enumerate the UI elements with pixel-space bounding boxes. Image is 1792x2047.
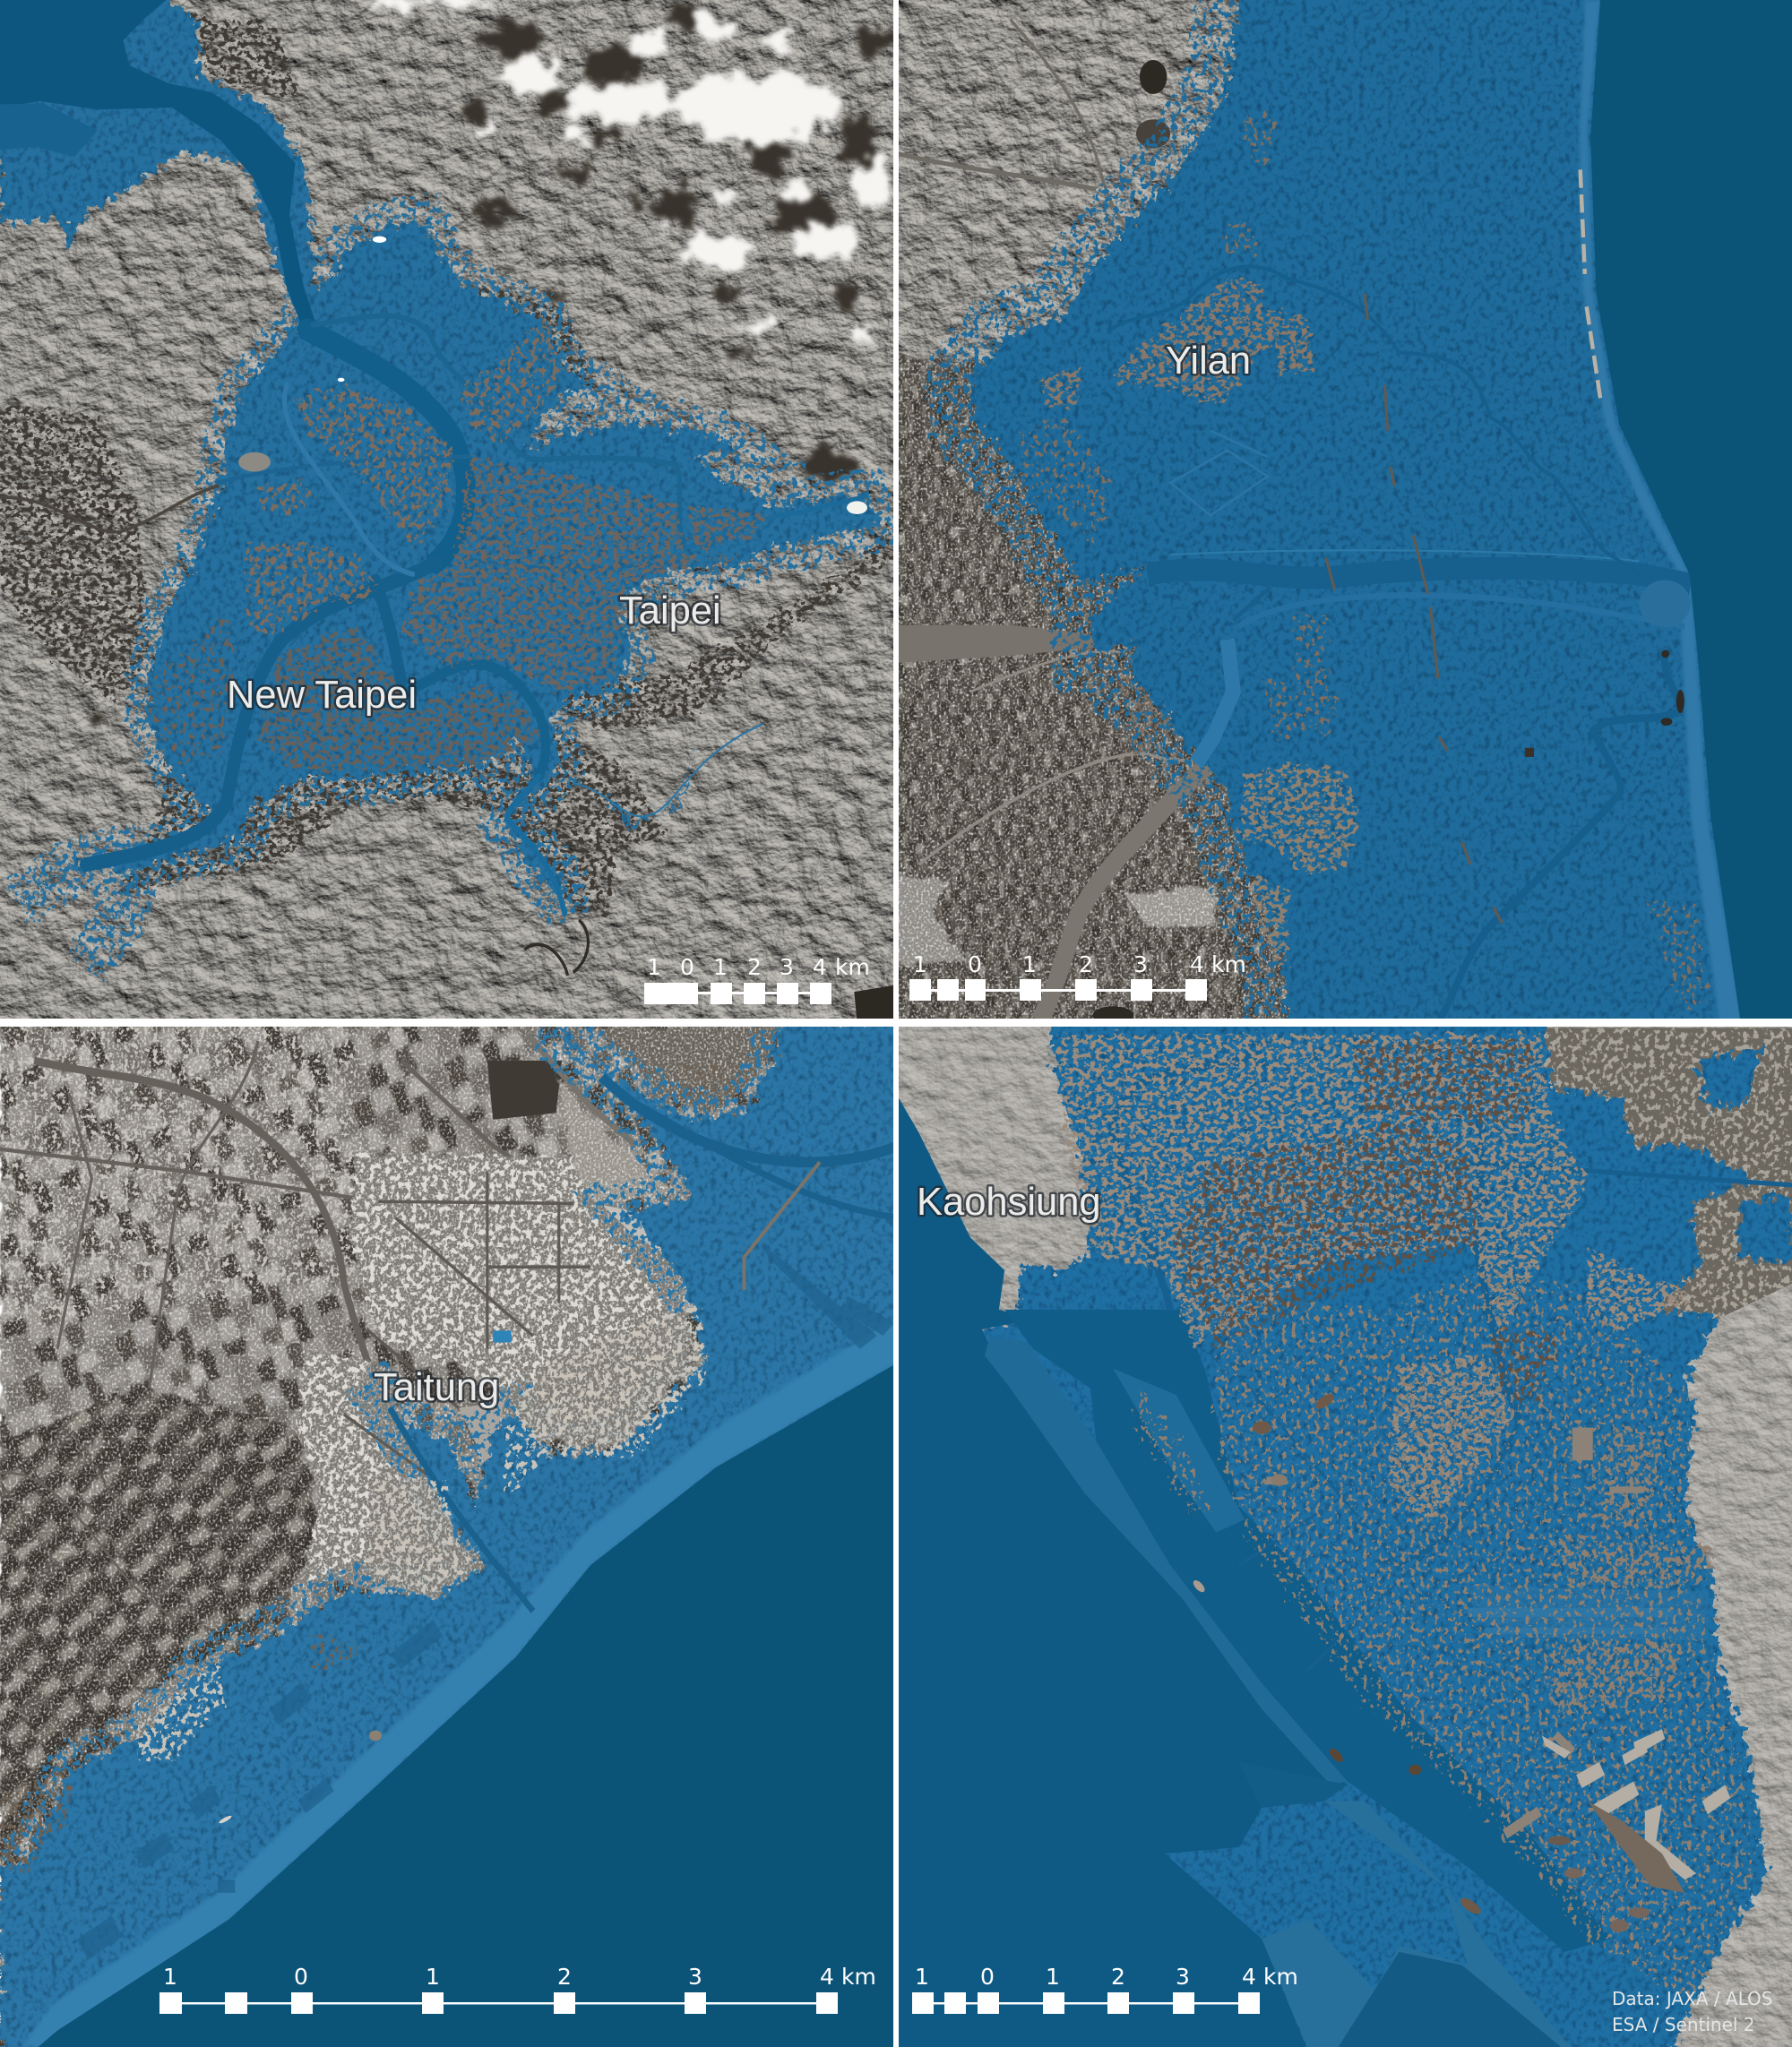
scale bar: Kaohsiung: 1 [915, 1964, 929, 1990]
dry blocks [1192, 1391, 1644, 1917]
mountain terrain [0, 0, 918, 1044]
main harbour channel [1004, 1310, 1611, 1952]
unflooded city to the north-east [1537, 1028, 1792, 1329]
scale bar: Taitung: 4 [820, 1964, 834, 1990]
flooded city: left basin [246, 320, 564, 633]
hills at the bottom [896, 874, 965, 966]
label: New Taipei: New Taipei [227, 674, 417, 717]
mixed farmland [0, 1021, 918, 2047]
white clouds [366, 0, 896, 340]
scale bar: Taitung: km [841, 1964, 876, 1990]
scale bar: Taipei: 1 [647, 954, 661, 980]
dark fields [0, 1389, 321, 1867]
town: base [120, 1152, 688, 1755]
lanyang river [1148, 568, 1691, 584]
small flooded pool [493, 1330, 512, 1342]
submerged fields [77, 1244, 894, 1959]
airport runway [1462, 1585, 1708, 1640]
Beinan river channels [390, 1077, 899, 1611]
scale bar: Taipei: 3 [780, 954, 794, 980]
sea [896, 1329, 1348, 2047]
map: Taitung coast [0, 1021, 918, 2047]
dark reservoir spots [1525, 748, 1534, 757]
airfield outline [1170, 431, 1268, 515]
map: Taipei basin [0, 0, 918, 1044]
scale bar: Kaohsiung: 0 [980, 1964, 995, 1990]
flooded city: Taipei [401, 457, 768, 692]
roads and streams [896, 20, 1193, 864]
scale bar: Taitung: 2 [557, 1964, 572, 1990]
speckled edge of the flood [0, 1021, 918, 2047]
sea and Tamsui estuary [0, 0, 320, 340]
data credit [1612, 1988, 1772, 2035]
sea [1590, 0, 1792, 1025]
streams [1107, 267, 1680, 1021]
flooded town: Yilan [1039, 278, 1314, 411]
mountain terrain [896, 0, 1297, 391]
flooded town edge [138, 1303, 705, 1762]
stadium [459, 1401, 504, 1466]
flooded city: dry building blocks [1056, 1035, 1696, 1526]
map: Kaohsiung harbour [884, 1008, 1792, 2047]
gravel river bed [896, 625, 1096, 663]
coastal sand [1581, 169, 1600, 398]
city grain [1537, 1028, 1792, 1329]
scale bar: Taitung: 3 [688, 1964, 702, 1990]
scale bar: Taipei: 1 [713, 954, 728, 980]
flooded town: Luodong [1239, 763, 1359, 966]
scale bar: Kaohsiung [912, 1964, 1298, 2014]
lake and meander at the lower right [854, 985, 896, 1021]
port basin [0, 103, 98, 157]
scale bar: Kaohsiung: 2 [1111, 1964, 1125, 1990]
scale bar: Yilan [909, 951, 1246, 1001]
breakwater [744, 1162, 820, 1290]
label: Taipei: Taipei [619, 589, 721, 632]
shallow coastal band [1579, 0, 1742, 1021]
speckled edge of the flood [17, 222, 877, 966]
label: Yilan: Yilan [1166, 340, 1251, 383]
outer basin [1336, 1952, 1564, 2047]
panel: Kaohsiung flood map [884, 1008, 1792, 2047]
inner wharves [1113, 1369, 1245, 1533]
urban outskirts [0, 13, 894, 914]
dark paddy fields [896, 356, 1331, 1044]
cloud shadows [90, 9, 898, 725]
rivers [0, 315, 866, 914]
town: bright urban grain [120, 1152, 688, 1755]
scale bar: Taipei: 0 [680, 954, 694, 980]
scale bar: Yilan: 4 [1190, 951, 1204, 977]
scale bar: Yilan: 3 [1133, 951, 1148, 977]
river mouth [1639, 581, 1691, 627]
flood extent [970, 0, 1792, 1044]
label: Kaohsiung: Kaohsiung [917, 1181, 1101, 1224]
scale bar: Taitung: 0 [294, 1964, 308, 1990]
panel: Taipei and New Taipei flood map [0, 0, 918, 1044]
scale bar: Taitung: 1 [426, 1964, 440, 1990]
flood extent [0, 1021, 918, 2047]
town: street grid [344, 1172, 590, 1493]
scale bar: Yilan: 2 [1079, 951, 1093, 977]
fine urban grain over farmland [0, 1021, 356, 1323]
flood extent [884, 1008, 1792, 2047]
bridge line with dry patches [1326, 294, 1502, 924]
flood extent [0, 0, 877, 966]
islands of dry land [238, 452, 271, 472]
scale bar: Kaohsiung: km [1263, 1964, 1298, 1990]
scale bar: Kaohsiung: 3 [1176, 1964, 1190, 1990]
scale bar: Taipei: 2 [747, 954, 762, 980]
scale bar: Yilan: 0 [968, 951, 982, 977]
dark lakes [1140, 60, 1167, 94]
sandbar [559, 1080, 682, 1205]
shipyard ground [1588, 1802, 1684, 1893]
scattered dry patches [1019, 117, 1708, 1005]
flood lighter coast band [23, 1316, 899, 2047]
panel: Yilan flood map [896, 0, 1792, 1044]
canal and arterial channels [1116, 1028, 1792, 1670]
scale bar: Kaohsiung: 1 [1046, 1964, 1060, 1990]
shipyard at the south [1542, 1729, 1730, 1879]
scale bar: Taipei: 4 [813, 954, 827, 980]
flooded city: New Taipei [258, 626, 545, 770]
label: Taitung: Taitung [374, 1366, 499, 1409]
scale bar: Taipei [644, 954, 870, 1004]
scale bar: Yilan: 1 [1022, 951, 1037, 977]
scale bar: Taitung [159, 1964, 876, 2014]
rivers and roads [0, 1035, 636, 1618]
west coast water beside the hill [896, 1093, 1033, 1336]
flooded city: darker patches [1170, 1041, 1564, 1401]
flooded city: western edge [149, 614, 235, 763]
map: Yilan plain [896, 0, 1792, 1044]
pale hills [896, 1021, 1792, 2047]
dense lots in the airport district [1547, 1428, 1719, 1709]
data credit: ESA / Sentinel 2 [1612, 2014, 1755, 2035]
scale bar: Kaohsiung: 4 [1242, 1964, 1256, 1990]
scale bar: Taitung: 1 [163, 1964, 177, 1990]
panel: Taitung flood map [0, 1021, 918, 2047]
dry spots in the flood [0, 1061, 757, 1873]
sea [34, 1362, 918, 2047]
data credit: Data: JAXA / ALOS [1612, 1988, 1772, 2009]
scale bar: Taipei: km [835, 954, 870, 980]
port land [985, 1336, 1348, 1785]
scale bar: Yilan: 1 [913, 951, 927, 977]
speckled edge of the flood [970, 0, 1792, 1044]
flooded city: scattered lots across the south [1136, 1270, 1753, 2004]
scale bar: Yilan: km [1211, 951, 1246, 977]
